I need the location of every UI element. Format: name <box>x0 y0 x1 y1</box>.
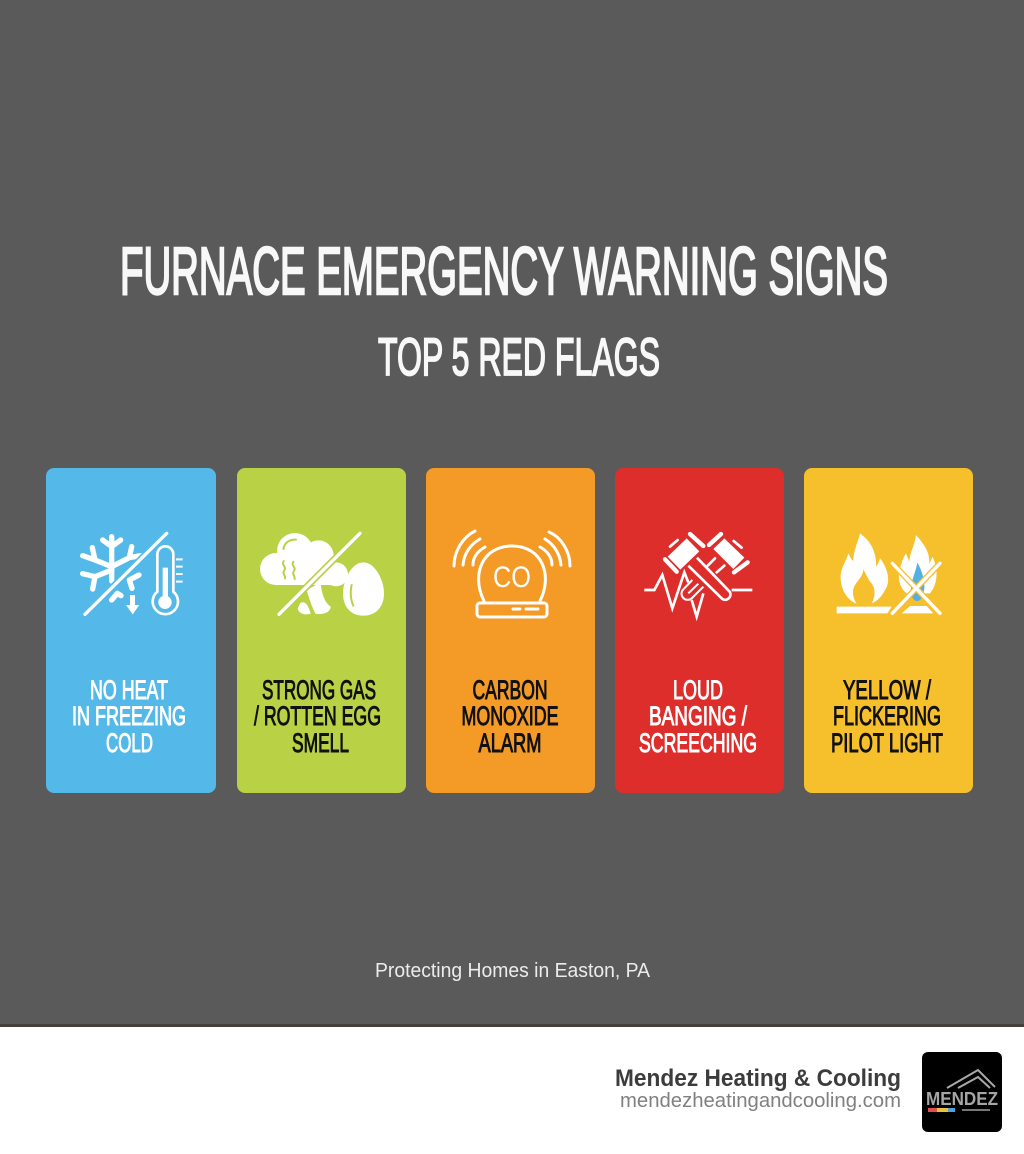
label: pilot light: PILOT LIGHT <box>831 728 943 758</box>
label: carbon monoxide: MONOXIDE <box>462 701 558 731</box>
panel: no heat <box>46 468 216 793</box>
logo <box>922 1052 1002 1132</box>
panel: gas smell <box>237 468 406 793</box>
label: loud noises <box>639 675 757 758</box>
label: pilot light: FLICKERING <box>833 701 941 731</box>
label: no heat <box>72 675 186 758</box>
label: gas smell <box>254 675 381 758</box>
label: pilot light: YELLOW / <box>843 675 931 705</box>
label: no heat: NO HEAT <box>90 675 168 705</box>
label: carbon monoxide: CARBON <box>472 675 548 705</box>
panel: pilot light <box>804 468 973 793</box>
icon: CO alarm <box>454 531 570 617</box>
label: no heat: IN FREEZING <box>72 701 186 731</box>
label: loud noises: SCREECHING <box>639 728 757 758</box>
logo: MENDEZ <box>926 1089 998 1109</box>
subtitle: TOP 5 RED FLAGS <box>378 328 660 387</box>
label: gas smell: STRONG GAS <box>262 675 376 705</box>
panel: carbon monoxide <box>426 468 595 793</box>
label: gas smell: SMELL <box>292 728 349 758</box>
tagline: Protecting Homes in Easton, PA <box>375 960 651 982</box>
icon: snowflake and thermometer <box>83 533 183 614</box>
icon: flames <box>837 533 940 613</box>
label: no heat: COLD <box>106 728 153 758</box>
label: pilot light <box>831 675 943 758</box>
icon: hammers and sound wave <box>644 534 752 617</box>
brand name: Mendez Heating & Cooling <box>615 1065 901 1092</box>
label: loud noises: LOUD <box>673 675 723 705</box>
icon: CO alarm: CO <box>493 561 531 594</box>
panel: loud noises <box>615 468 784 793</box>
label: carbon monoxide <box>462 675 558 758</box>
website: mendezheatingandcooling.com <box>620 1090 901 1112</box>
label: gas smell: / ROTTEN EGG <box>254 701 381 731</box>
icon: cloud and egg <box>260 533 384 616</box>
label: carbon monoxide: ALARM <box>478 728 542 758</box>
label: loud noises: BANGING / <box>649 701 747 731</box>
footer <box>0 1024 1024 1154</box>
